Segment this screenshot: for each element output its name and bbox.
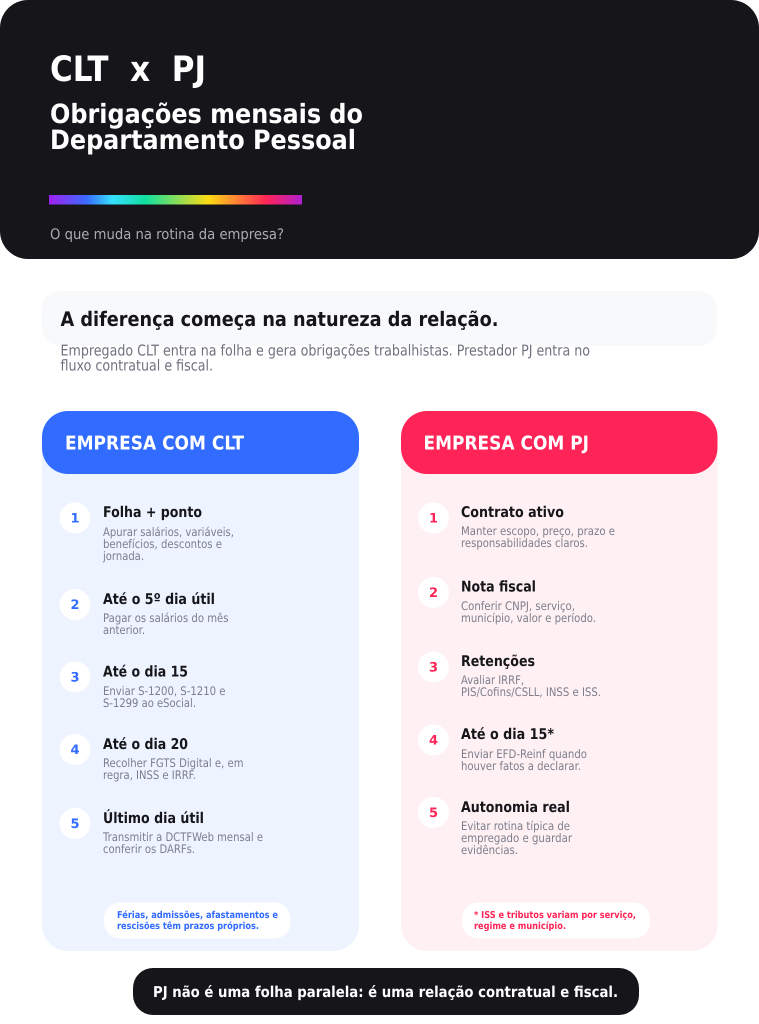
PJ step 4: 4 <box>429 734 438 748</box>
CLT step 3: Enviar S-1200, S-1210 e <box>103 684 226 698</box>
PJ step 4: Até o dia 15* <box>461 726 554 743</box>
CLT step 2 <box>60 589 228 637</box>
CLT step 2: Até o 5º dia útil <box>103 591 215 608</box>
CLT step 1: jornada. <box>102 549 144 563</box>
CLT column header <box>42 411 359 474</box>
CLT step 3: 3 <box>70 670 80 686</box>
CLT step 5: 5 <box>70 817 80 832</box>
panel: empresa com PJ <box>401 411 718 951</box>
PJ step 2: 2 <box>429 586 438 601</box>
subtitle: Departamento Pessoal <box>50 125 356 156</box>
CLT step 3: Até o dia 15 <box>103 664 188 680</box>
bottom callout <box>133 968 639 1015</box>
CLT step 1: Apurar salários, variáveis, <box>103 525 234 539</box>
PJ step 3: PIS/Cofins/CSLL, INSS e ISS. <box>461 685 601 699</box>
PJ step 4 <box>418 724 587 773</box>
PJ step 1: 1 <box>429 512 438 526</box>
subtitle: Obrigações mensais do <box>50 99 363 130</box>
CLT note: Férias, admissões, afastamentos e <box>117 910 278 921</box>
PJ step 5: 5 <box>429 806 438 821</box>
PJ step 1: Contrato ativo <box>461 504 564 521</box>
PJ step 3: Avaliar IRRF, <box>461 673 524 687</box>
CLT step 5: conferir os DARFs. <box>103 842 195 856</box>
PJ step 1: Manter escopo, preço, prazo e <box>461 524 615 538</box>
PJ step 5 <box>418 797 572 857</box>
PJ step 5: Autonomia real <box>461 799 570 816</box>
CLT step 1: benefícios, descontos e <box>103 537 222 551</box>
PJ step 3: Retenções <box>461 653 535 670</box>
CLT step 3: S-1299 ao eSocial. <box>103 696 196 710</box>
header panel <box>0 0 759 259</box>
CLT step 4: regra, INSS e IRRF. <box>103 768 196 782</box>
subtitle <box>50 99 363 156</box>
PJ step 3: 3 <box>429 660 438 676</box>
PJ column header <box>401 411 718 474</box>
CLT step 5: Último dia útil <box>103 809 204 827</box>
CLT note <box>104 902 290 938</box>
PJ step 4: Enviar EFD-Reinf quando <box>461 747 587 761</box>
tagline: O que muda na rotina da empresa? <box>50 227 284 243</box>
PJ step 4: houver fatos a declarar. <box>461 759 581 773</box>
intro panel <box>42 291 717 374</box>
PJ step 3 <box>418 652 601 699</box>
intro text <box>60 342 590 374</box>
CLT step 4 <box>60 734 244 782</box>
rainbow bar <box>49 195 302 204</box>
PJ step 5: evidências. <box>461 843 518 857</box>
PJ step 1: responsabilidades claros. <box>461 536 588 550</box>
PJ note: * ISS e tributos variam por serviço, <box>474 910 636 921</box>
panel: empresa com CLT <box>42 411 359 951</box>
PJ step 5: Evitar rotina típica de <box>461 819 570 833</box>
CLT step 1 <box>60 502 234 563</box>
PJ column header: EMPRESA COM PJ <box>424 432 589 454</box>
PJ step 1 <box>418 502 615 550</box>
PJ step 2: Nota fiscal <box>461 578 536 596</box>
CLT step 4: Recolher FGTS Digital e, em <box>103 756 244 770</box>
CLT step 2: anterior. <box>103 623 145 637</box>
PJ step 2: Conferir CNPJ, serviço, <box>461 599 575 613</box>
PJ note: regime e município. <box>474 921 566 932</box>
CLT step 2: Pagar os salários do mês <box>103 611 228 625</box>
PJ note <box>462 902 650 938</box>
CLT step 5: Transmitir a DCTFWeb mensal e <box>102 830 263 844</box>
CLT note: rescisões têm prazos próprios. <box>117 921 259 932</box>
CLT step 2: 2 <box>70 598 80 613</box>
CLT column header: EMPRESA COM CLT <box>65 432 244 454</box>
CLT step 1: 1 <box>70 512 80 526</box>
CLT step 1: Folha + ponto <box>103 504 202 521</box>
CLT step 3 <box>60 662 226 710</box>
CLT step 5 <box>60 808 263 856</box>
CLT step 4: Até o dia 20 <box>103 736 188 753</box>
PJ step 2 <box>418 577 596 625</box>
title: CLT x PJ <box>50 50 206 90</box>
intro heading: A diferença começa na natureza da relação. <box>60 307 498 331</box>
intro text: fluxo contratual e fiscal. <box>60 356 213 374</box>
PJ step 2: município, valor e período. <box>461 611 596 625</box>
intro text: Empregado CLT entra na folha e gera obrigações trabalhistas. Prestador PJ entra no <box>60 342 590 360</box>
bottom callout: PJ não é uma folha paralela: é uma relação contratual e fiscal. <box>153 983 618 1001</box>
PJ step 5: empregado e guardar <box>461 831 572 845</box>
CLT step 4: 4 <box>70 743 80 758</box>
